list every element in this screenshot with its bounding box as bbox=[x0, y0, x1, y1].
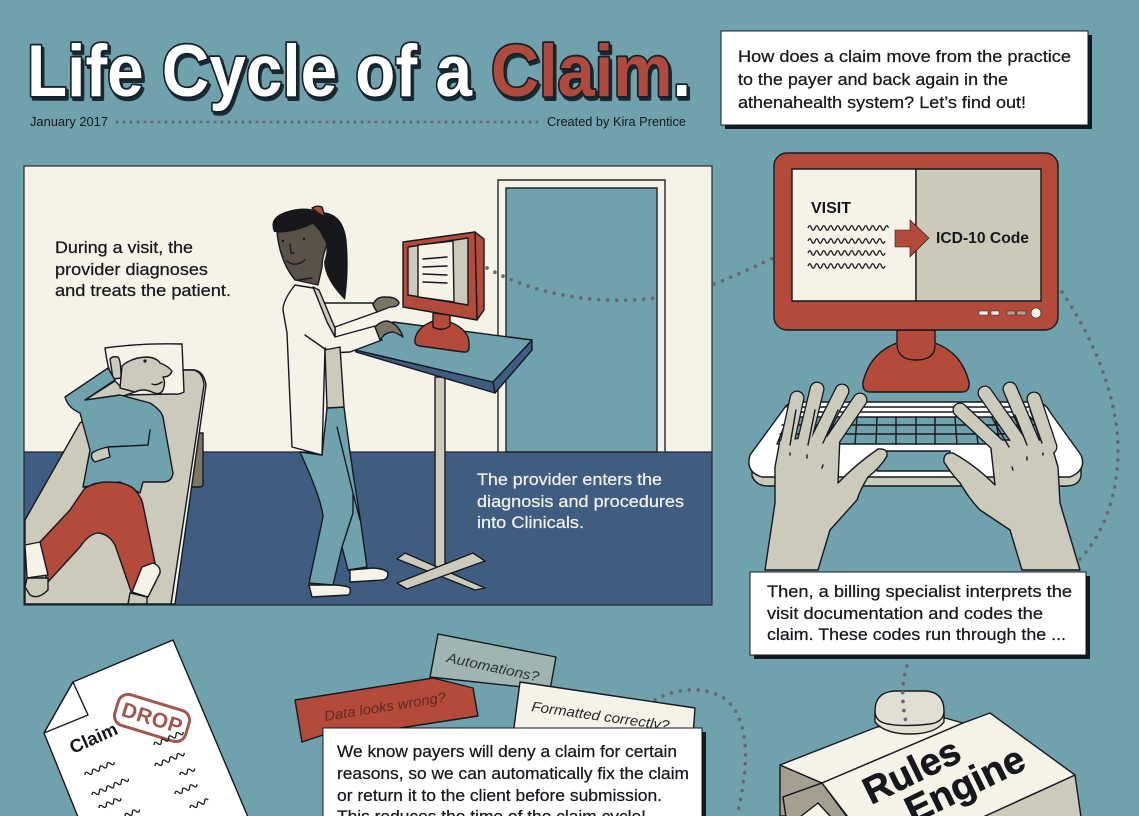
intro callout bbox=[721, 31, 1092, 129]
stamp: drop: DROP bbox=[119, 698, 185, 739]
label: claim: Claim bbox=[66, 718, 121, 758]
arrow bbox=[895, 220, 929, 257]
tag: formatted correctly bbox=[513, 682, 695, 735]
stamp: drop bbox=[112, 692, 192, 744]
billing callout bbox=[750, 572, 1090, 659]
automation callout: We know payers will deny a claim for certain bbox=[337, 742, 677, 761]
rules engine box bbox=[780, 691, 1081, 816]
automation callout: or return it to the client before submission. bbox=[337, 786, 662, 805]
panel: exam room scene bbox=[24, 166, 712, 605]
dotted connector: big monitor to billing callout bbox=[1062, 292, 1118, 570]
dotted connector: loop behind tags bbox=[655, 690, 745, 816]
intro callout: to the payer and back again in the bbox=[738, 70, 1008, 89]
keyboard bbox=[749, 402, 1083, 486]
intro callout: athenahealth system? Let’s find out! bbox=[738, 93, 1026, 112]
dotted connector: scene to big monitor bbox=[714, 258, 773, 284]
title: Claim. bbox=[491, 31, 691, 112]
right hand bbox=[944, 389, 1080, 570]
automation callout: reasons, so we can automatically fix the claim bbox=[337, 764, 689, 783]
standing desk bbox=[355, 322, 532, 590]
text: visit: During a visit, the bbox=[55, 238, 193, 257]
tag: automations bbox=[430, 634, 556, 690]
patient on exam table bbox=[25, 344, 206, 604]
scribbled lines bbox=[84, 730, 209, 816]
claim document bbox=[44, 640, 248, 816]
left hand bbox=[765, 389, 887, 570]
rules engine button bbox=[875, 691, 944, 734]
dotted connector: callout to button bbox=[903, 666, 907, 722]
handwritten notes bbox=[808, 226, 888, 268]
label: code: ICD-10 Code bbox=[936, 230, 1029, 247]
panel frame bbox=[24, 166, 712, 605]
title: Life Cycle of a bbox=[27, 31, 473, 112]
tag: data looks wrong: Data looks wrong? bbox=[323, 689, 447, 724]
tag: data looks wrong bbox=[295, 678, 478, 742]
billing callout: Then, a billing specialist interprets the bbox=[767, 582, 1072, 601]
automation callout bbox=[323, 728, 706, 816]
big monitor bbox=[774, 153, 1058, 392]
byline row: January 2017 bbox=[30, 115, 108, 129]
dotted connector to door bbox=[487, 268, 655, 300]
label: rules: Rules bbox=[857, 730, 968, 813]
small monitor bbox=[403, 232, 484, 352]
byline row: Created by Kira Prentice bbox=[547, 115, 686, 129]
room background bbox=[24, 166, 712, 605]
byline row bbox=[30, 115, 686, 129]
billing callout: claim. These codes run through the ... bbox=[767, 625, 1066, 644]
doctor bbox=[272, 206, 403, 597]
text: visit bbox=[55, 238, 231, 300]
text: clinicals: diagnosis and procedures bbox=[477, 492, 684, 511]
intro callout: How does a claim move from the practice bbox=[738, 47, 1071, 66]
label: visit: VISIT bbox=[811, 200, 851, 217]
monitor buttons bbox=[979, 308, 1041, 318]
text: clinicals bbox=[477, 470, 684, 532]
text: clinicals: The provider enters the bbox=[477, 470, 662, 489]
tag: automations: Automations? bbox=[444, 649, 541, 685]
text: visit: and treats the patient. bbox=[55, 281, 231, 300]
hands on keyboard bbox=[765, 389, 1080, 570]
tag: formatted correctly: Formatted correctly? bbox=[531, 698, 671, 733]
text: clinicals: into Clinicals. bbox=[477, 513, 584, 532]
billing callout: visit documentation and codes the bbox=[767, 604, 1043, 623]
text: visit: provider diagnoses bbox=[55, 260, 208, 279]
